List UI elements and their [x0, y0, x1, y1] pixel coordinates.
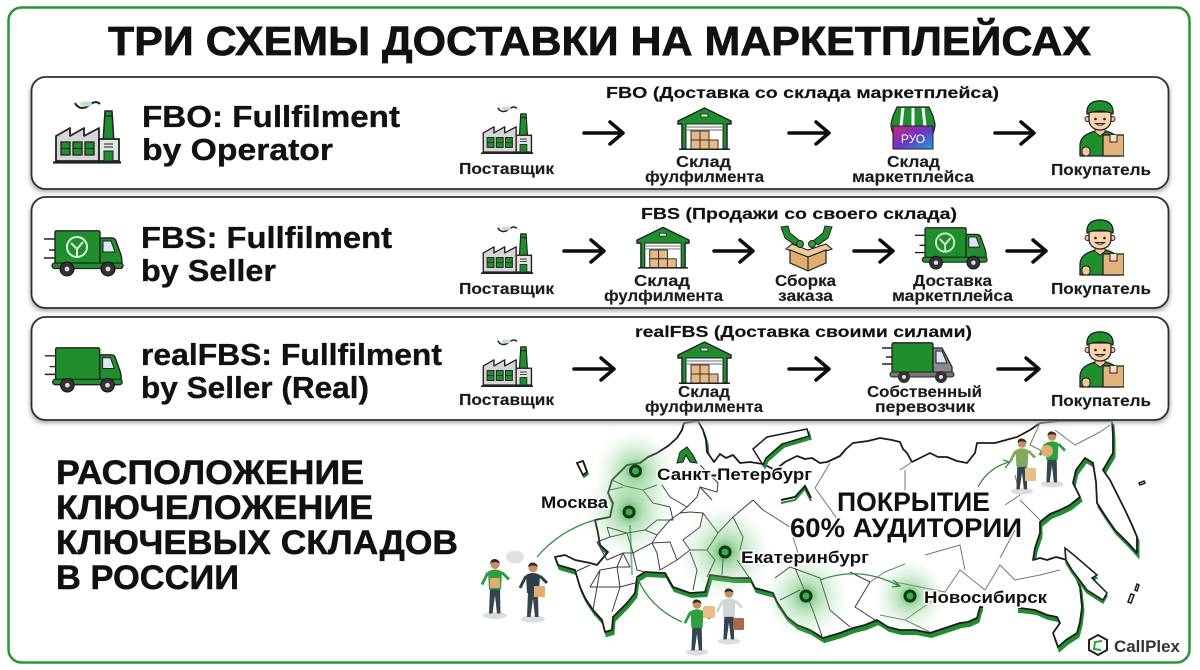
coverage callout: [790, 487, 1022, 543]
coverage callout: 60% АУДИТОРИИ: [790, 513, 1022, 543]
arrow: [564, 240, 604, 262]
icon: delivery truck: [44, 231, 123, 276]
step: own carrier: [867, 343, 982, 416]
step: supplier: [459, 340, 554, 409]
arrow: [854, 240, 893, 262]
warehouse locations heading: [56, 454, 458, 597]
step: order assembly: [775, 226, 836, 305]
arrow: [584, 122, 623, 144]
city labels: Екатеринбург: [741, 548, 869, 567]
step: buyer: Покупатель: [1051, 281, 1151, 298]
city labels: [541, 465, 1048, 607]
step: supplier: Поставщик: [459, 161, 554, 178]
city labels: Москва: [541, 493, 609, 512]
realFBS heading: by Seller (Real): [141, 370, 369, 405]
white sea: [677, 447, 697, 463]
people: far-east pair: [1010, 431, 1065, 494]
step: own carrier: Собственный: [867, 384, 982, 401]
step: supplier: [459, 107, 554, 178]
FBS panel card: [30, 197, 1170, 311]
FBO panel card: [30, 77, 1170, 192]
FBS heading: by Seller: [141, 253, 276, 288]
icon: factory: [53, 102, 121, 162]
map connection arrows: [537, 460, 1010, 622]
step: supplier: [459, 227, 554, 298]
realFBS panel card: [30, 317, 1170, 423]
step: fulfilment warehouse: Склад: [676, 154, 731, 171]
warehouse locations heading: КЛЮЧЕВЫХ СКЛАДОВ: [56, 524, 458, 562]
step: marketplace delivery: [892, 228, 1013, 305]
warehouse locations heading: РАСПОЛОЖЕНИЕ: [56, 454, 364, 492]
step: supplier: Поставщик: [459, 392, 554, 409]
step: buyer: [1051, 101, 1151, 179]
arrow: [574, 358, 614, 380]
step: supplier: Поставщик: [459, 281, 554, 298]
map shadow: [556, 425, 1138, 651]
step: fulfilment warehouse: Склад: [634, 273, 690, 290]
map of Russia: [537, 421, 1145, 651]
realFBS heading: realFBS: Fullfilment: [141, 337, 442, 372]
FBO heading: by Operator: [142, 132, 333, 167]
coverage callout: ПОКРЫТИЕ: [837, 487, 990, 517]
panel: realFBS: [30, 317, 1170, 423]
arrow: [998, 358, 1039, 380]
realFBS scheme title: realFBS (Доставка своими силами): [635, 324, 972, 341]
step: own carrier: перевозчик: [875, 399, 975, 416]
arrow: [1007, 240, 1046, 262]
step: buyer: [1051, 220, 1151, 298]
icon: truck: [45, 348, 122, 392]
FBS heading: [141, 220, 392, 288]
step: marketplace delivery: Доставка: [913, 273, 992, 290]
step: buyer: Покупатель: [1051, 393, 1151, 410]
step: marketplace warehouse: [852, 107, 974, 186]
step: buyer: Покупатель: [1051, 162, 1151, 179]
city glow: [585, 431, 946, 638]
panel: FBO: [30, 77, 1170, 192]
FBS heading: FBS: Fullfilment: [141, 220, 392, 255]
step: fulfilment warehouse: фулфилмента: [604, 288, 723, 305]
step: order assembly: Сборка: [775, 273, 836, 290]
gap near Mongolia border: [983, 609, 1018, 611]
step: fulfilment warehouse: [604, 227, 723, 305]
arrow: [789, 122, 829, 144]
warehouse locations heading: КЛЮЧЕЛОЖЕНИЕ: [56, 489, 373, 527]
FBO heading: [142, 99, 400, 167]
FBS scheme title: FBS (Продажи со своего склада): [641, 206, 957, 223]
step: marketplace warehouse: маркетплейса: [852, 169, 974, 186]
FBO heading: FBO: Fullfilment: [142, 99, 400, 134]
panel: FBS: [30, 197, 1170, 311]
logo: CallPlex: [1089, 635, 1181, 656]
islands: [577, 429, 1145, 603]
city labels: Новосибирск: [924, 588, 1048, 607]
step: buyer: [1051, 332, 1151, 410]
title: ТРИ СХЕМЫ ДОСТАВКИ НА МАРКЕТПЛЕЙСАХ: [108, 18, 1091, 64]
step: fulfilment warehouse: [645, 108, 764, 186]
realFBS heading: [141, 337, 442, 405]
arrow: [714, 240, 753, 262]
logo: CallPlex: CallPlex: [1114, 638, 1181, 656]
people: left pair: [482, 550, 547, 622]
step: marketplace warehouse: РУО: [901, 132, 925, 146]
step: fulfilment warehouse: фулфилмента: [645, 169, 764, 186]
step: marketplace warehouse: Склад: [887, 154, 940, 171]
step: order assembly: заказа: [778, 288, 833, 305]
FBO scheme title: FBO (Доставка со склада маркетплейса): [606, 85, 999, 102]
arrow: [995, 122, 1034, 144]
step: fulfilment warehouse: [645, 342, 763, 416]
region borders: [575, 423, 1110, 636]
warehouse locations heading: В РОССИИ: [56, 559, 239, 597]
city labels: Санкт-Петербург: [657, 465, 812, 484]
step: marketplace delivery: маркетплейса: [892, 288, 1013, 305]
step: fulfilment warehouse: Склад: [678, 384, 730, 401]
city markers: [624, 466, 915, 601]
arrow: [789, 358, 829, 380]
people: centre pair: [685, 588, 744, 655]
step: fulfilment warehouse: фулфилмента: [645, 399, 763, 416]
map outline: [555, 421, 1137, 647]
